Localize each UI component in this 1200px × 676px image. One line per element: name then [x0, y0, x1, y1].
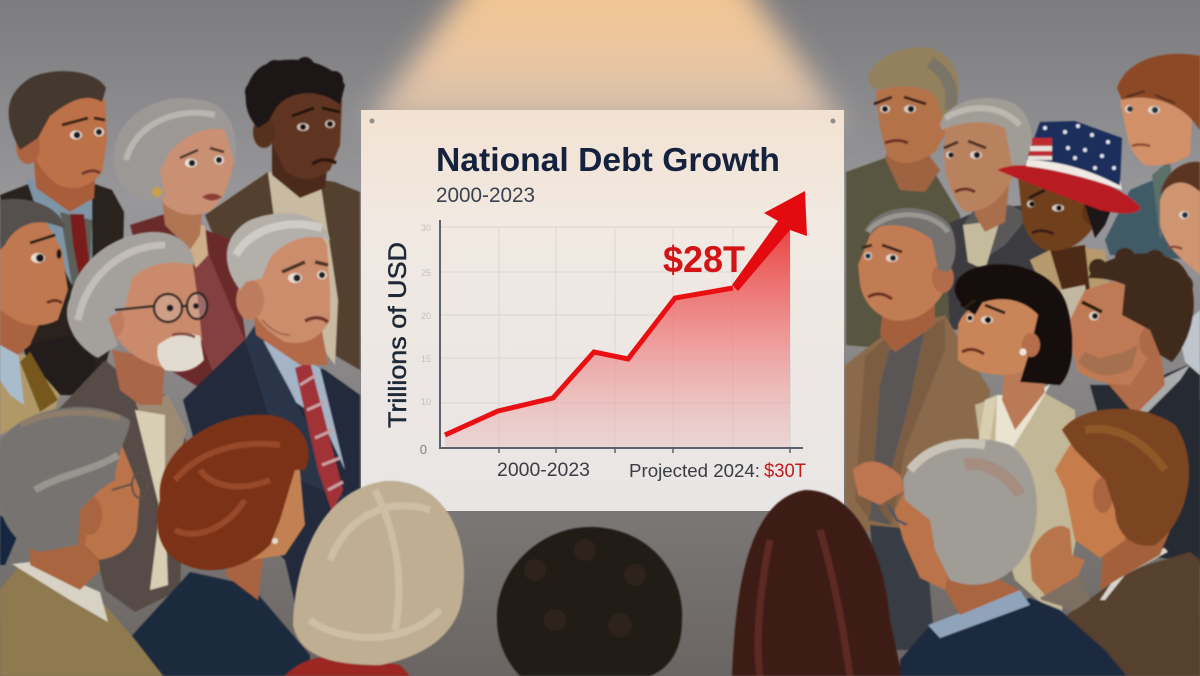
- back row audience: right: [846, 47, 1200, 350]
- y axis tick labels: [421, 223, 431, 407]
- person: woman with American flag hat: [997, 121, 1141, 330]
- person: dark-skinned man in brown jacket: [205, 57, 360, 370]
- projection label: Projected 2024:: [629, 461, 760, 481]
- person: young man in teal, top right: [1105, 54, 1200, 260]
- icon: glasses: [115, 293, 207, 322]
- person: grey-haired woman in maroon: [114, 98, 246, 400]
- y axis tick labels: 10: [421, 397, 431, 407]
- red arrow: [732, 191, 807, 291]
- y axis tick labels: 20: [421, 311, 431, 321]
- x axis label: 2000-2023: [497, 460, 590, 481]
- zero label: 0: [420, 442, 427, 457]
- person: man in tan jacket: [845, 208, 990, 650]
- front row audience: [0, 400, 1200, 676]
- person: worried man in navy suit and striped tie: [183, 213, 360, 625]
- y axis title: Trillions of USD: [384, 242, 412, 428]
- person: man with brown hair and hand on chin: [1030, 400, 1200, 676]
- y axis tick labels: 15: [421, 354, 431, 364]
- person: man at left edge: [0, 199, 95, 435]
- person: man in olive shirt: [846, 47, 960, 350]
- icon: flag hat: [997, 121, 1141, 214]
- middle row audience: right: [845, 208, 1200, 650]
- chart subtitle: 2000-2023: [436, 184, 535, 207]
- person: man viewed from behind with glasses: [0, 407, 163, 676]
- glasses: [112, 472, 148, 498]
- person: curly dark hair from behind: [497, 527, 682, 676]
- person: grey-haired man in dark shirt: [940, 98, 1065, 330]
- person: grey-haired man from behind: [888, 439, 1127, 676]
- poster pins: [370, 118, 836, 124]
- person: woman with long auburn hair from behind: [732, 490, 902, 676]
- y axis tick labels: 30: [421, 223, 431, 233]
- back row audience: left: [0, 57, 360, 400]
- person: blonde woman from behind: [285, 481, 464, 676]
- y axis tick labels: 25: [421, 268, 431, 278]
- value callout: $28T: [663, 239, 745, 280]
- person: woman with black hair: [955, 264, 1078, 620]
- hand on chin: [1030, 526, 1085, 595]
- middle row audience: left: [0, 199, 360, 625]
- line chart: [420, 191, 807, 482]
- spotlight: [365, 0, 845, 125]
- poster: [361, 110, 844, 511]
- data line: [445, 288, 733, 435]
- person: woman with auburn hair: [128, 415, 310, 676]
- person: old bearded man with glasses: [58, 232, 207, 612]
- area under line: [445, 227, 790, 448]
- hand: [853, 462, 905, 505]
- person: man with red tie: [0, 71, 124, 395]
- axes: [440, 220, 803, 448]
- projection value: $30T: [764, 461, 806, 482]
- chart title: National Debt Growth: [436, 141, 780, 178]
- person: woman at right edge: [1160, 162, 1200, 275]
- person: man with curly hair and dark suit: [1065, 248, 1200, 565]
